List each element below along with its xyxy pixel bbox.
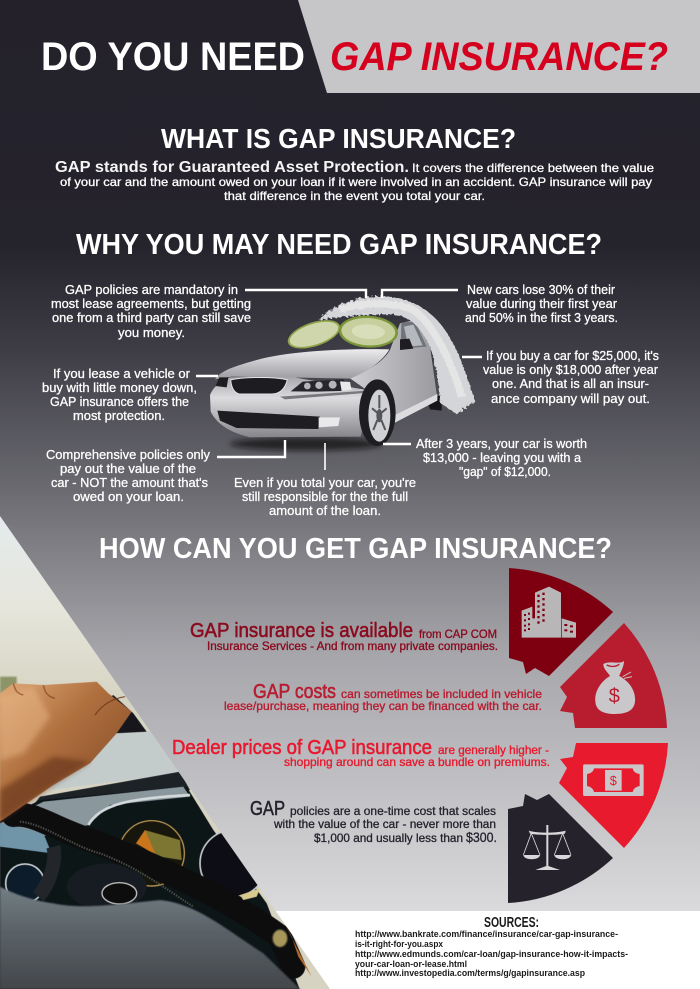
wedge: banknote (559, 743, 668, 848)
sources (355, 915, 628, 979)
text block: gap definition: It covers the difference between the value (412, 161, 654, 175)
text block: gap definition: that difference in the event you total your car. (224, 189, 485, 203)
sources: your-car-loan-or-lease.html (355, 959, 467, 970)
item 2: costs: can sometimes be included in vehicle (341, 687, 542, 701)
heading: what is gap insurance: WHAT IS GAP INSURANCE? (161, 123, 516, 154)
item 3: dealer prices: shopping around can save a bundle on premiums. (284, 755, 550, 769)
callout: mandatory in lease agreements (51, 282, 251, 340)
item 2: costs: GAP costs (253, 681, 336, 703)
text block: gap definition: GAP stands for Guaranteed Asset Protection. (55, 159, 409, 176)
item 2: costs: lease/purchase, meaning they can be financed with the car. (224, 699, 542, 713)
connector lines (196, 290, 482, 470)
photo: hand on steering wheel (0, 510, 340, 989)
item 4: one-time cost: policies are a one-time cost that scales (290, 804, 496, 818)
callout: mandatory in lease agreements: GAP policies are mandatory in (65, 282, 238, 297)
callout: buying a car for 25,000: value is only $18,000 after year (483, 362, 659, 377)
callout: comprehensive policies (46, 447, 210, 504)
icon: building (522, 587, 576, 638)
callout: lease with little money down: GAP insurance offers the (50, 394, 189, 409)
item 3: dealer prices (172, 737, 550, 769)
callout: buying a car for 25,000: one. And that is all an insur- (492, 376, 649, 391)
wedge: building (509, 568, 613, 676)
item 4: one-time cost: with the value of the car - never more than (273, 817, 496, 831)
title banner panel (298, 0, 700, 93)
item 4: one-time cost: $300. (466, 829, 497, 845)
item 3: dealer prices: Dealer prices of GAP insurance (172, 737, 432, 759)
callout: new cars lose value: and 50% in the first 3 years. (465, 310, 618, 325)
callout: after 3 years: "gap" of $12,000. (459, 464, 551, 479)
title (41, 35, 668, 79)
item 4: one-time cost: $1,000 and usually less than (314, 831, 463, 845)
item 1: availability: Insurance Services - And from many private companies. (207, 639, 498, 653)
item 1: availability: from CAP COM (419, 627, 497, 641)
item 1: availability (190, 620, 498, 653)
item 3: dealer prices: are generally higher - (438, 743, 549, 757)
callout: mandatory in lease agreements: one from a third party can still save (52, 310, 251, 325)
item 4: one-time cost (250, 798, 497, 845)
callout: total your car: still responsible for the the full (242, 489, 408, 504)
callout: after 3 years: After 3 years, your car is worth (416, 436, 587, 451)
callout: mandatory in lease agreements: you money. (118, 325, 185, 340)
callout: total your car: Even if you total your car, you're (234, 475, 416, 490)
item 2: costs (224, 681, 542, 713)
callout: lease with little money down: If you lease a vehicle or (53, 366, 191, 381)
callout: after 3 years: $13,000 - leaving you with a (423, 450, 582, 465)
callout: buying a car for 25,000: If you buy a car for $25,000, it's (486, 348, 659, 363)
callout: mandatory in lease agreements: most lease agreements, but getting (51, 296, 251, 311)
text block: gap definition (55, 159, 654, 203)
icon: money bag (595, 661, 635, 714)
heading: how can you get gap insurance: HOW CAN YOU GET GAP INSURANCE? (99, 533, 612, 565)
callout: comprehensive policies: car - NOT the amount that's (51, 475, 208, 490)
title: GAP INSURANCE? (330, 35, 668, 79)
callout: comprehensive policies: pay out the value of the (60, 461, 196, 476)
icon: money bag: $ (609, 685, 620, 707)
heading: why you may need gap insurance: WHY YOU MAY NEED GAP INSURANCE? (76, 229, 602, 261)
callout: lease with little money down: most protection. (73, 408, 165, 423)
item 1: availability: GAP insurance is available (190, 620, 413, 642)
callout: buying a car for 25,000: ance company will pay out. (491, 391, 650, 406)
callout: total your car (234, 475, 416, 518)
callout: new cars lose value: New cars lose 30% of their (467, 282, 616, 297)
callout: total your car: amount of the loan. (269, 503, 381, 518)
sources: http://www.bankrate.com/finance/insurance/car-gap-insurance- (355, 929, 618, 940)
icon: banknote (583, 764, 644, 796)
wedge: money bag (560, 623, 667, 728)
sources: http://www.edmunds.com/car-loan/gap-insurance-how-it-impacts- (355, 949, 628, 960)
sources: SOURCES: (484, 915, 539, 931)
wedge: scales (508, 794, 613, 903)
callout: new cars lose value (465, 282, 618, 325)
callout: lease with little money down (42, 366, 197, 423)
car illustration (210, 296, 475, 451)
callout: comprehensive policies: Comprehensive policies only (46, 447, 210, 462)
text block: gap definition: of your car and the amount owed on your loan if it were involved in an accident. GAP insurance will pay (60, 175, 652, 189)
callout: comprehensive policies: owed on your loan. (73, 489, 184, 504)
icon: banknote: $ (610, 774, 617, 788)
white footer band (0, 911, 700, 989)
callout: lease with little money down: buy with little money down, (42, 380, 197, 395)
item 4: one-time cost: GAP (250, 798, 285, 820)
icon: scales of justice (523, 825, 571, 870)
title: DO YOU NEED (41, 35, 305, 79)
sources: is-it-right-for-you.aspx (355, 939, 444, 950)
callout: after 3 years (416, 436, 587, 479)
callout: new cars lose value: value during their first year (466, 296, 618, 311)
sources: http://www.investopedia.com/terms/g/gapinsurance.asp (355, 968, 585, 979)
callout: buying a car for 25,000 (483, 348, 659, 406)
